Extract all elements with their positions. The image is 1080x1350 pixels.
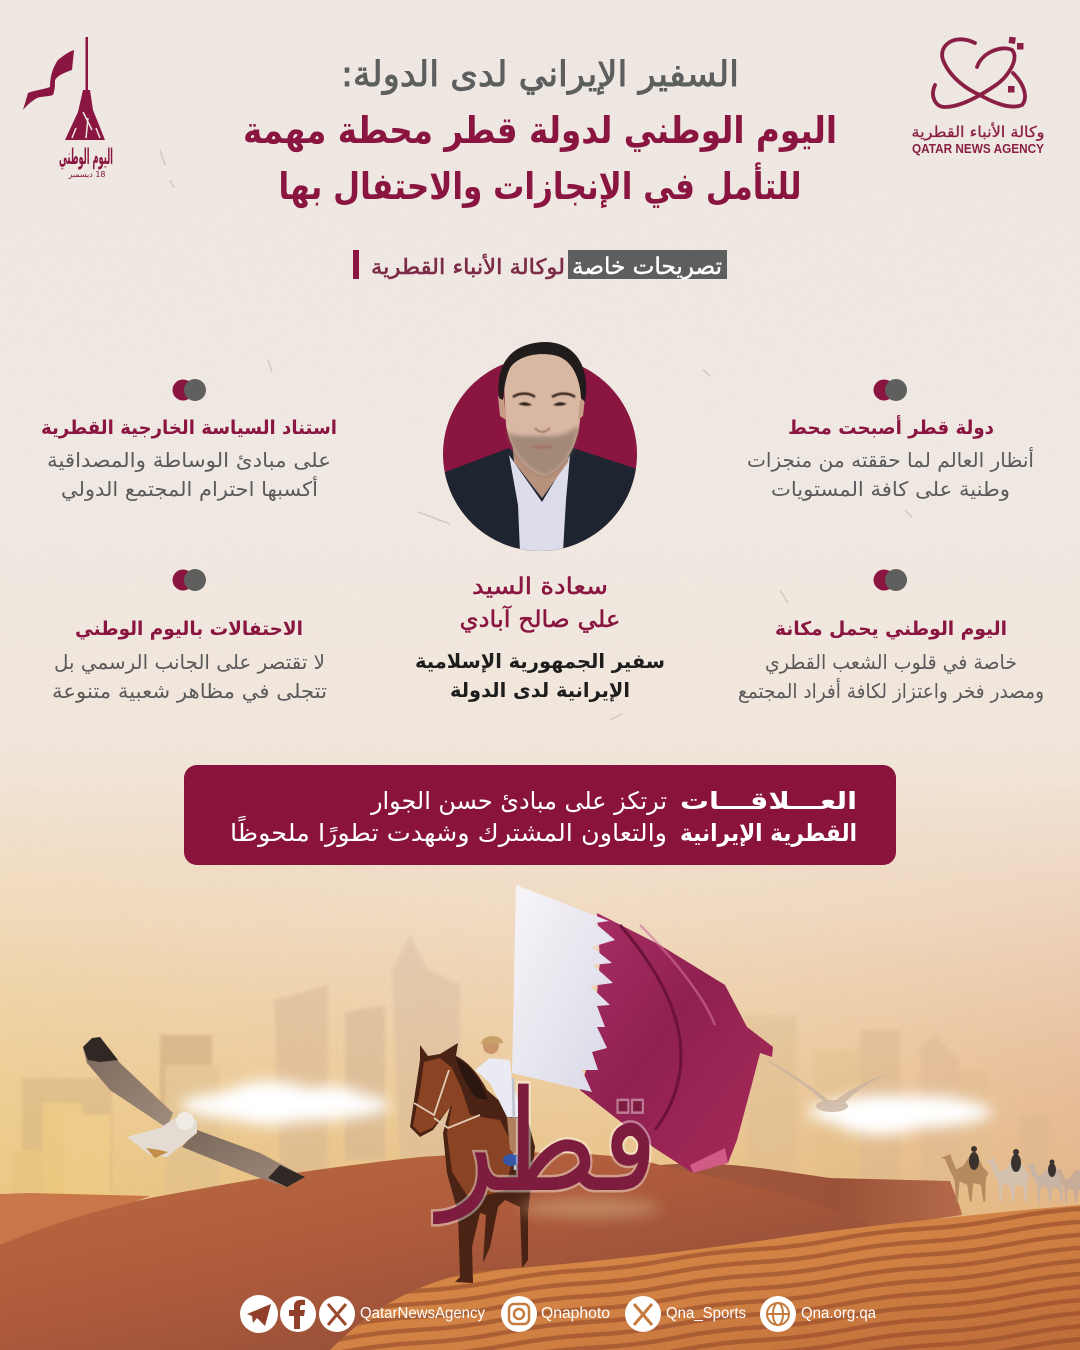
handle: Qna.org.qa: Qna.org.qa [801, 1305, 876, 1322]
statement: world eyes [747, 379, 1034, 501]
statement: foreign policy [41, 379, 337, 502]
emblem squares [1008, 37, 1024, 92]
dust cloud [520, 1198, 660, 1218]
foreground dune [330, 1205, 1080, 1350]
icon: X sports [625, 1296, 661, 1332]
flag ribbon [23, 50, 74, 110]
skyline right [745, 1015, 1050, 1185]
beard shading [507, 425, 579, 476]
honorific: سعادة السيد [472, 574, 608, 600]
statement line 1: ترتكز على مبادئ حسن الجوار [370, 787, 667, 815]
main dune [0, 1152, 900, 1350]
title block [243, 55, 837, 208]
horse mane [456, 1058, 488, 1100]
ears [498, 396, 585, 420]
rider [475, 1036, 525, 1170]
social links bar [240, 1295, 876, 1333]
body line 1: أنظار العالم لما حققته من منجزات [747, 447, 1034, 472]
maroon disc [443, 357, 637, 551]
statement: celebrations [52, 569, 327, 704]
grey label [568, 250, 727, 279]
title line 1: سفير الجمهورية الإسلامية [415, 649, 665, 673]
body line 2: تتجلى في مظاهر شعبية متنوعة [52, 679, 327, 704]
icon: facebook [280, 1296, 316, 1332]
portrait [440, 342, 640, 560]
heading: دولة قطر أصبحت محط [788, 415, 994, 439]
bullet dots [172, 569, 206, 591]
headline line 2: للتأمل في الإنجازات والاحتفال بها [278, 162, 802, 208]
agency arabic name: وكالة الأنباء القطرية [912, 122, 1044, 141]
logo: Qatar News Agency [912, 37, 1045, 156]
bullet dots [874, 569, 907, 591]
body line 1: خاصة في قلوب الشعب القطري [765, 650, 1017, 675]
face details [513, 394, 575, 449]
falcon [83, 1037, 305, 1187]
icon: X [319, 1296, 355, 1332]
handle: Qna_Sports: Qna_Sports [666, 1305, 746, 1322]
face [504, 354, 581, 476]
ambassador name and title [415, 574, 665, 702]
bullet dots [874, 379, 907, 401]
camel caravan [941, 1146, 1080, 1203]
far left dune [0, 1193, 150, 1250]
suit and shirt [444, 448, 636, 551]
clouds [180, 1081, 992, 1135]
bold term line 2: القطرية الإيرانية [680, 819, 857, 847]
bridle [414, 1070, 480, 1128]
heading: استناد السياسة الخارجية القطرية [41, 417, 337, 439]
relations banner [184, 765, 896, 865]
source text: لوكالة الأنباء القطرية [371, 254, 565, 279]
handle: Qnaphoto: Qnaphoto [541, 1305, 610, 1322]
faint seagull [762, 1058, 905, 1112]
icon: globe [760, 1296, 796, 1332]
label text: تصريحات خاصة [572, 254, 722, 280]
icon: instagram [501, 1296, 537, 1332]
body line 2: وطنية على كافة المستويات [771, 477, 1010, 501]
flag pole [86, 37, 88, 92]
back dune right [660, 1163, 962, 1260]
bullet dots [172, 379, 206, 401]
kicker: السفير الإيراني لدى الدولة: [341, 55, 739, 95]
headline line 1: اليوم الوطني لدولة قطر محطة مهمة [243, 109, 837, 153]
infographic canvas: اليوم الوطني [59, 145, 113, 170]
body line 1: لا تقتصر على الجانب الرسمي بل [54, 650, 325, 675]
horse and rider [410, 1036, 535, 1283]
statement line 2: والتعاون المشترك وشهدت تطورًا ملحوظًا [230, 816, 667, 847]
name: علي صالح آبادي [460, 605, 620, 633]
banner panel [184, 765, 896, 865]
skyline left [12, 935, 460, 1195]
body line 2: ومصدر فخر واعتزاز لكافة أفراد المجتمع [738, 678, 1044, 703]
heading: اليوم الوطني يحمل مكانة [775, 618, 1007, 640]
subheading [353, 250, 727, 280]
body line 1: على مبادئ الوساطة والمصداقية [47, 448, 331, 472]
bold term line 1: العـــلاقـــات [680, 787, 857, 815]
qatar calligraphy: قطر [433, 1061, 658, 1224]
logo: national day [23, 37, 113, 179]
statement: national day status [738, 569, 1044, 703]
tower and hand [65, 90, 105, 140]
date: 18 ديسمبر [68, 170, 106, 179]
handle: QatarNewsAgency: QatarNewsAgency [360, 1305, 485, 1322]
heading: الاحتفالات باليوم الوطني [75, 618, 303, 640]
agency english name: QATAR NEWS AGENCY [912, 142, 1045, 156]
accent bar [353, 250, 359, 279]
Qatar flag [512, 885, 773, 1173]
title line 2: الإيرانية لدى الدولة [450, 678, 630, 702]
qatar calligraphy: قطر [433, 1061, 658, 1224]
neck [512, 440, 570, 498]
horse body [410, 1043, 535, 1283]
hair [498, 342, 586, 402]
horse coat [413, 1058, 515, 1200]
body line 2: أكسبها احترام المجتمع الدولي [61, 476, 318, 502]
orbit emblem [933, 39, 1025, 107]
icon: telegram [240, 1295, 278, 1333]
